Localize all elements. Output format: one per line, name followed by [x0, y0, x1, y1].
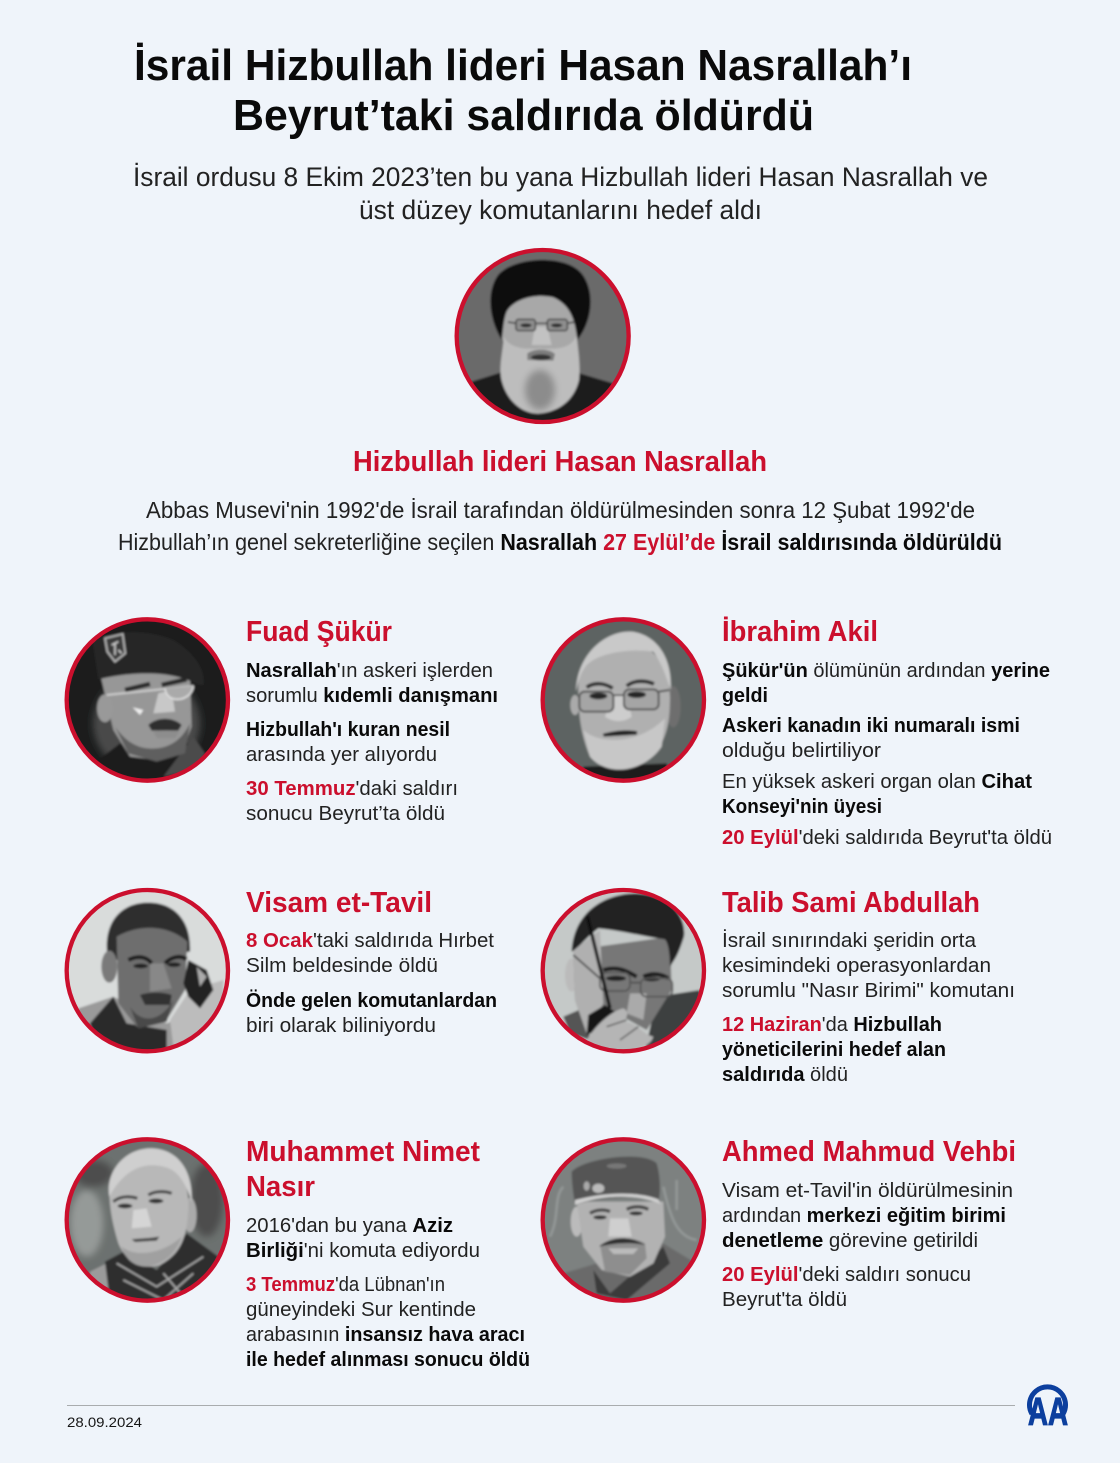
details: güneyindeki Sur kentinde: [246, 1298, 476, 1321]
details: Silm beldesinde öldü: [246, 954, 438, 977]
details: denetleme görevine getirildi: [722, 1229, 978, 1252]
name: İbrahim Akil: [722, 616, 878, 648]
details: Visam et-Tavil'in öldürülmesinin: [722, 1179, 1013, 1202]
details: 12 Haziran'da Hizbullah: [722, 1013, 942, 1036]
details: Şükür'ün ölümünün ardından yerine: [722, 659, 1050, 682]
leader description: Abbas Musevi'nin 1992'de İsrail tarafından öldürülmesinden sonra 12 Şubat 1992'de: [146, 497, 975, 523]
panel: Fuad Şükür: [50, 610, 498, 825]
name: Fuad Şükür: [246, 616, 392, 648]
panel: Muhammet Nimet Nasır: [50, 1130, 530, 1371]
details: İsrail sınırındaki şeridin orta: [722, 929, 977, 952]
details: [722, 659, 1052, 849]
name: Muhammet Nimet: [246, 1136, 480, 1168]
subtitle: [133, 161, 988, 225]
leader description: [118, 497, 1002, 555]
subtitle: İsrail ordusu 8 Ekim 2023’ten bu yana Hizbullah lideri Hasan Nasrallah ve: [133, 161, 988, 192]
footer line: [67, 1405, 1015, 1406]
details: olduğu belirtiliyor: [722, 739, 881, 762]
date: 28.09.2024: [67, 1414, 142, 1430]
details: Askeri kanadın iki numaralı ismi: [722, 714, 1020, 737]
details: Konseyi'nin üyesi: [722, 795, 882, 818]
portrait: Talib Sami Abdullah: [540, 888, 706, 1054]
details: 3 Temmuz'da Lübnan'ın: [246, 1273, 445, 1296]
details: [246, 1214, 530, 1371]
details: En yüksek askeri organ olan Cihat: [722, 770, 1032, 793]
details: saldırıda öldü: [722, 1063, 848, 1086]
details: sonucu Beyrut’ta öldü: [246, 802, 445, 825]
leader description: Hizbullah’ın genel sekreterliğine seçilen Nasrallah 27 Eylül’de İsrail saldırısında öldürüldü: [118, 529, 1002, 555]
details: sorumlu kıdemli danışmanı: [246, 684, 498, 707]
details: 30 Temmuz'daki saldırı: [246, 777, 458, 800]
name: Talib Sami Abdullah: [722, 887, 980, 919]
title: [134, 41, 912, 140]
details: geldi: [722, 684, 768, 707]
details: Birliği'ni komuta ediyordu: [246, 1239, 480, 1262]
details: Beyrut'ta öldü: [722, 1288, 847, 1311]
panel: İbrahim Akil: [530, 610, 1052, 849]
portrait: Fuad Şükür: [64, 617, 230, 783]
name: Nasır: [246, 1171, 315, 1203]
subtitle: üst düzey komutanlarını hedef aldı: [359, 195, 762, 225]
portrait: Muhammet Nimet Nasır: [64, 1137, 230, 1303]
details: biri olarak biliniyordu: [246, 1014, 436, 1037]
panel: Visam et-Tavil: [64, 888, 496, 1054]
details: Hizbullah'ı kuran nesil: [246, 718, 450, 741]
details: 20 Eylül'deki saldırıda Beyrut'ta öldü: [722, 826, 1052, 849]
details: Nasrallah'ın askeri işlerden: [246, 659, 493, 682]
panel: Talib Sami Abdullah: [530, 880, 1015, 1086]
details: arabasının insansız hava aracı: [246, 1323, 525, 1346]
details: ile hedef alınması sonucu öldü: [246, 1348, 530, 1371]
icon: AA logo: AA: [1028, 1391, 1068, 1434]
portrait: İbrahim Akil: [540, 617, 706, 783]
title: Beyrut’taki saldırıda öldürdü: [233, 91, 814, 140]
details: 20 Eylül'deki saldırı sonucu: [722, 1263, 971, 1286]
details: sorumlu "Nasır Birimi" komutanı: [722, 979, 1015, 1002]
details: [722, 1179, 1013, 1311]
panel: Ahmed Mahmud Vehbi: [530, 1130, 1016, 1311]
details: arasında yer alıyordu: [246, 743, 437, 766]
portrait: Visam et-Tavil: [64, 888, 230, 1054]
details: [722, 929, 1015, 1086]
details: [246, 659, 498, 825]
details: ardından merkezi eğitim birimi: [722, 1204, 1006, 1227]
title: İsrail Hizbullah lideri Hasan Nasrallah’ı: [134, 41, 912, 90]
details: yöneticilerini hedef alan: [722, 1038, 946, 1061]
heading: leader name: Hizbullah lideri Hasan Nasrallah: [353, 446, 767, 478]
portrait: Hasan Nasrallah: [454, 248, 631, 424]
details: 2016'dan bu yana Aziz: [246, 1214, 453, 1237]
details: [246, 929, 497, 1037]
details: Önde gelen komutanlardan: [246, 989, 497, 1012]
details: kesimindeki operasyonlardan: [722, 954, 991, 977]
details: 8 Ocak'taki saldırıda Hırbet: [246, 929, 494, 952]
name: [246, 1136, 480, 1203]
name: Ahmed Mahmud Vehbi: [722, 1136, 1016, 1168]
portrait: Ahmed Mahmud Vehbi: [540, 1137, 706, 1303]
icon: AA logo: [1028, 1387, 1068, 1434]
name: Visam et-Tavil: [246, 887, 432, 919]
